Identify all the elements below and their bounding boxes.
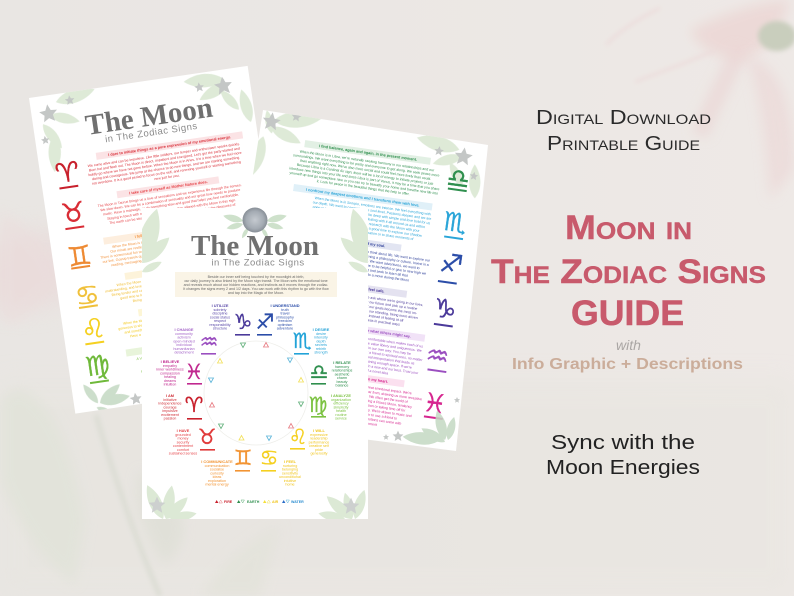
Virgo section: attention to details, health, routine and all our habits now [143, 348, 230, 365]
subtitle: info graphic plus descriptions: Info Graphic + Descriptions [512, 356, 743, 373]
Sagittarius section: horizon. It is a time of new adventures, learning a philosophy or culture. Invest in a [302, 245, 429, 267]
keyword list: Aquarius: I CHANGE [174, 327, 194, 332]
keyword list: Cancer [279, 459, 301, 486]
keyword list: Libra: balance [336, 384, 348, 388]
right sheet foliage [253, 110, 480, 198]
Gemini section: Our minds are restless, we are chatty, and we love sharing all of our thoughts [110, 232, 229, 254]
zodiac sign glyphs on wheel: ♏︎ [293, 329, 312, 353]
zodiac wheel circle [204, 341, 308, 445]
zodiac sign glyphs on wheel: ♌︎ [289, 425, 307, 449]
keyword list: Cancer: I FEEL [284, 459, 297, 464]
Pisces section: that go out of enlightenment [334, 417, 377, 427]
tagline line 1: Sync with the [551, 432, 695, 454]
intro text box: It changes the signs every 2 and 1/2 days. You can work with this rhythm to go with the flow [183, 287, 329, 291]
keyword list: Pisces: inner worldliness [156, 368, 184, 372]
element legend: FIRE [224, 500, 233, 504]
zodiac sign glyphs on wheel [185, 310, 328, 472]
Virgo section: A Virgo Moon brings a grounded need to put all things into order [136, 343, 236, 361]
keyword list: Libra: beauty [336, 380, 348, 384]
keyword list: Pisces: intuition [164, 382, 176, 386]
Aries section [88, 132, 243, 185]
Cancer section: Being kept to the ones we love will be all that matters now [132, 286, 222, 303]
keyword list: Virgo [331, 393, 351, 420]
keyword list: Sagittarius: freedom [278, 319, 292, 323]
Taurus section: The Moon in Taurus brings us a love of sensations and we experience life through the senses. [97, 183, 242, 208]
main title line 3: GUIDE [571, 294, 684, 333]
connector word: with: with [616, 337, 641, 353]
front subtitle: in The Zodiac Signs [211, 258, 305, 268]
keyword list: Scorpio: rebirth [316, 347, 326, 351]
keyword list: Virgo: I ANALYZE [331, 393, 351, 398]
Leo section: When the Moon is in Leo we want to be noticed and feel proud of all we do [123, 305, 238, 326]
Cancer section: When the Moon is in Cancer, we need comfort and security from the people [116, 266, 233, 287]
zodiac sign glyphs on wheel: ♑︎ [234, 310, 252, 334]
keyword list: Aries: passion [164, 416, 176, 420]
Scorpio section [288, 184, 434, 243]
intro text box [175, 272, 337, 297]
keyword list: Scorpio: desire [316, 332, 326, 336]
zodiac sign glyphs on wheel: ♋︎ [260, 446, 278, 470]
keyword list: Leo: expressive [310, 433, 328, 437]
keyword list: Capricorn: sobriety [214, 308, 227, 312]
heading: digital download: Digital Download [536, 107, 711, 129]
Aquarius section: being free, we'll find that we feel more in a new and our best. Trust your [308, 356, 419, 375]
keyword list: Libra [332, 360, 353, 388]
Gemini section: When the Moon is in Gemini, we want to learn about everything around us [112, 228, 226, 249]
keyword list: Leo: creative self [309, 444, 330, 448]
Aries section: new just for you. [154, 173, 180, 181]
intro text box: and reveals much about our hidden reactions, and instincts as it moves through the zodiac. [184, 283, 328, 287]
Taurus section: The earth can be steadied most by slowing on down and enjoying the pleasures of [109, 203, 236, 225]
zodiac sign glyphs on wheel: ♐︎ [256, 310, 274, 334]
Gemini section: our link. Gossip travels quickly, keep the connection going with all friends and neighbours [102, 240, 240, 264]
keyword list: Aquarius: individual [176, 343, 192, 347]
front sheet stars [149, 497, 359, 514]
zodiac sign glyphs on wheel: ♓︎ [185, 360, 203, 384]
Aquarius section: intuition for a high of a novel idea [337, 364, 389, 375]
keyword list: Leo: performance [309, 440, 329, 444]
keyword list: Gemini: ideas [213, 475, 222, 479]
document page: front sheet with zodiac wheel [133, 206, 377, 523]
Aries section: daring and courageous. We jump at the chance to do new things, and we are starting something [92, 156, 240, 181]
main title line 1: Moon in [565, 209, 692, 247]
Scorpio section: and to engage with transformation or to share moments of [324, 225, 414, 241]
keyword list: Taurus [169, 428, 197, 456]
keyword list: Libra: harmony [335, 365, 349, 369]
keyword list: Gemini: socialise [210, 468, 224, 472]
keyword list: Scorpio: depth [316, 339, 326, 343]
right sheet zodiac glyphs: ♑︎ [431, 293, 459, 326]
intro text box: our daily journey is also linked by the Moon sign transit. The Moon sets the emotional tone [184, 279, 328, 283]
left sheet zodiac glyphs: ♋︎ [73, 279, 102, 313]
Taurus section: on down and enjoying the simple things. [142, 212, 204, 225]
Libra section: When the Moon is in Libra, we're naturally seeking harmony in our relationships and our [299, 150, 435, 173]
keyword list: Taurus: sustained senses [169, 452, 197, 456]
keyword list: Cancer: sensitivity [282, 471, 298, 475]
zodiac sign glyphs on wheel: ♎︎ [310, 360, 328, 384]
Scorpio section: open to transformation. Our thirst to be deep with simple and love bold for us [312, 205, 431, 225]
Sagittarius section: be honest. Do not be afraid. It is a good time to be helpful or give to new high we [302, 254, 426, 276]
Aries section: I dare to initiate things as a pure expression of my emotional energy. [108, 135, 231, 157]
keyword list: Cancer: unconditional [279, 475, 301, 479]
keyword list: Aries: initiative [163, 398, 177, 402]
keyword list: Pisces [156, 359, 184, 386]
Aquarius section: a new idea. A perfect time for spiritual interpretation that leads us [315, 348, 415, 366]
Virgo section: I heal through service. [152, 342, 193, 352]
Aries section: not overdone. It is a good period to focus on the self, and renewing yourself or starting something [92, 160, 241, 186]
Sagittarius section: Laughter brings us out of the rut and seek to learn all that [320, 261, 408, 278]
keyword list: Taurus: I HAVE [177, 428, 190, 433]
moon illustration with leaves [222, 208, 288, 239]
keyword list: Libra: relationships [332, 369, 353, 373]
keyword list: Aries [158, 393, 182, 420]
keyword list: Aquarius: activism [177, 336, 191, 340]
Leo section: generous to shine and be seen. We have warm hearts and are playful in love with [118, 309, 244, 331]
keyword list: Virgo: service [335, 416, 347, 420]
intro text box: Beside our inner self being touched by the moonlight at birth, [208, 275, 304, 279]
Sagittarius section: I follow the wisdom of my soul. [329, 237, 386, 248]
Virgo section: Analysis, completing tasks and being useful to others always [141, 356, 234, 374]
Aries section: boldly go where we have not gone before. When the Moon is in Aries, it is a time when we feel more [88, 151, 242, 177]
keyword list: Virgo: routine [335, 413, 347, 417]
Cancer section: when high and low [163, 295, 193, 303]
Pisces section: to imagination, music and all the arts. We often get the world of [311, 386, 408, 404]
keyword list: Pisces: healing [164, 375, 176, 379]
keyword list: Gemini: I COMMUNICATE [201, 459, 233, 464]
keyword list: Gemini: mental energy [205, 482, 229, 486]
element legend [215, 500, 304, 504]
keyword list: Sagittarius: philosophy [276, 315, 294, 319]
keyword list: Capricorn [209, 303, 231, 330]
keyword list: Sagittarius: optimism [278, 323, 292, 327]
keyword list: Aquarius: detachment [174, 350, 194, 354]
element legend: AIR [272, 500, 279, 504]
Taurus section: I take care of myself as Mother Nature does. [129, 180, 208, 195]
keyword list: Scorpio [313, 327, 330, 354]
Libra section [289, 140, 440, 196]
Scorpio section: to let go. We hold the pain to be dealing with it all around us and within [316, 210, 425, 229]
right sheet bottom foliage [403, 410, 456, 445]
Aquarius section: in a new direction, helping your gaining enough space. If we're [316, 352, 412, 370]
keyword list: Aquarius [173, 327, 195, 354]
right sheet stars [263, 112, 478, 180]
Leo section [118, 308, 142, 338]
element triangles around wheel [208, 342, 304, 440]
Sagittarius section: of travelling, being optimistic and free. We want adventures, we want to [310, 251, 420, 270]
keyword list: Scorpio: I DESIRE [313, 327, 330, 332]
keyword list: Cancer: nurturing [283, 464, 297, 468]
Libra section: it. Look for peace in the beautiful things that the help to offer. [316, 179, 410, 196]
keyword list: Taurus: security [177, 440, 190, 444]
zodiac sign glyphs on wheel: ♈︎ [185, 393, 203, 417]
keyword list: Capricorn: social status [210, 315, 230, 319]
left sheet zodiac glyphs: ♌︎ [79, 313, 108, 347]
Gemini section: I follow my curiosity. [134, 230, 172, 239]
keyword list: Virgo: simplicity [334, 405, 349, 409]
keyword list: Capricorn: discipline [212, 312, 228, 316]
keyword list: Aries: courage [163, 405, 177, 409]
Leo section: Have a good time with others and remember to laugh out loud today [130, 319, 235, 338]
left sheet zodiac glyphs: ♊︎ [65, 240, 94, 274]
Cancer section [105, 270, 142, 302]
keyword list: Pisces: dreams [164, 379, 176, 383]
Taurus section: music. Have a massage, or do something slow and good that helps you feel comfortable. [103, 193, 239, 216]
Capricorn section: We take the long view, plan for our future and pick up a routine [321, 293, 418, 311]
Cancer section: good time to look after our home and to keep our roots well cared for now [120, 280, 233, 300]
keyword list: Gemini: exploration [208, 479, 226, 483]
Pisces section: art with our sensitivity and emotions. During a Pisces Moon, tendency [305, 390, 413, 409]
keyword list: Gemini: communication [205, 464, 229, 468]
Pisces section: to merge with others, feeling compassion or taking time off for [310, 395, 406, 413]
Aquarius section: When the Moon is in Aquarius we're comfortable when makes each of us [311, 329, 424, 349]
Capricorn section: I do what makes me feel safe. [332, 282, 385, 294]
keyword list: Sagittarius: I UNDERSTAND [270, 303, 300, 308]
keyword list: Aquarius: humanitarian [173, 347, 195, 351]
Pisces section [368, 375, 422, 426]
Gemini section [100, 232, 142, 266]
Cancer section: I nurture my emotions. [154, 265, 195, 275]
keyword list: Sagittarius [270, 303, 300, 330]
left sheet foliage bottom [83, 384, 130, 410]
Scorpio section: our depth. We want to connect at the soul level. Passions deepen and we are [312, 200, 432, 221]
keyword list: Gemini: curiosity [210, 471, 224, 475]
Capricorn section: We wrote ideas and ideas in practical ways [333, 313, 400, 327]
Sagittarius section: Cheerfulness is ours. You might do a move during the Moon [317, 266, 409, 282]
Pisces section: When the Moon is in Pisces, we feel great emotional impact. We're [309, 377, 412, 395]
zodiac sign glyphs on wheel: ♉︎ [198, 425, 216, 449]
keyword list: Pisces: compassion [160, 371, 180, 375]
right sheet zodiac glyphs: ♎︎ [445, 163, 472, 196]
keyword list: Aries: excitement [161, 413, 179, 417]
Aries section: We come alive and can be impulsive. Like little soldiers, our temper and enthusiasm sparks quickly. [87, 142, 240, 168]
keyword list: Pisces: empathy [163, 364, 177, 368]
keyword list: Cancer: belonging [282, 468, 298, 472]
Scorpio section: I confront my deepest emotions and I transform them with love. [306, 188, 420, 208]
Leo section: I shine with my light. [164, 302, 202, 312]
Pisces section: have to do a kindness, each one's emotions can come with [311, 409, 402, 426]
keyword list: Scorpio: strength [314, 350, 328, 354]
Pisces section: It's a great time to find rest and to pull away. We're drawn to music and [303, 399, 412, 418]
heading: printable guide: Printable Guide [547, 133, 700, 155]
keyword list: Scorpio: secrets [315, 343, 327, 347]
Libra section: yourself up and go someplace nice or you can try to beautify your home and breathe new life into [289, 171, 438, 196]
Aquarius section: I live by my values no matter what others might say. [318, 322, 411, 339]
Cancer section: understanding, and love around us. We are more sensitive and caring than usual during this [105, 269, 246, 294]
Virgo section: health and wellbeing [173, 369, 205, 378]
Sagittarius section [368, 240, 430, 282]
left sheet zodiac glyphs: ♈︎ [53, 156, 82, 190]
keyword list: Aries: independence [158, 402, 182, 406]
keyword list: Libra: aesthetic [335, 372, 350, 376]
Gemini section: There is nonsensical fun to have. Keep the conversation going with everyone here and now [100, 235, 241, 260]
zodiac sign glyphs on wheel: ♊︎ [234, 446, 252, 470]
Libra section: introduce new things into your life and since Libra is part of Venus, it may be a time that you share [289, 166, 440, 191]
Gemini section: reading, messaging, social media and learning are all favoured during this time [111, 246, 232, 267]
Pisces section: sensitive to all around us. We need to disappear from, drawing us more receptive [297, 380, 422, 401]
document page: left sheet, Aries to Virgo [29, 66, 258, 414]
Leo section: and something theatrical brings us joy. Our creative spark is very high now [124, 314, 239, 335]
keyword list: Leo: pride [315, 448, 323, 452]
left sheet zodiac glyphs: ♉︎ [59, 196, 87, 230]
tagline line 2: Moon Energies [546, 457, 700, 479]
zodiac sign glyphs on wheel: ♍︎ [309, 393, 327, 417]
keyword list: Taurus: grounded [175, 433, 191, 437]
Scorpio section: Could be a time to do a kind of research with the Moon with your [320, 215, 421, 233]
keyword list: Leo: generosity [310, 452, 328, 456]
keyword list: Capricorn: respect [214, 319, 226, 323]
Taurus section: We slow down. We can be a combination of sensuality and our great love needs to produce [100, 188, 241, 212]
Leo section: Time outside to shine with friends and family [148, 326, 217, 340]
Sagittarius section: When the Moon is in Sagittarius, we love to think about life. We want to explore our [302, 241, 431, 263]
Capricorn section [368, 285, 423, 326]
left sheet zodiac glyphs [55, 160, 109, 384]
Aquarius section: We're often very open-minded and we value liberty and uniqueness. We [311, 333, 422, 353]
main title line 2: The Zodiac Signs [491, 253, 766, 291]
Libra section: surroundings. We want everything to be pretty and everyone to get along. We seek peace more [293, 153, 440, 178]
keyword list: Taurus: contentment [173, 444, 193, 448]
right sheet bottom stars [383, 397, 460, 441]
keyword list: Aquarius: open-minded [173, 339, 195, 343]
Virgo section: brings us, and those around us, a sense of quiet calm [147, 361, 230, 377]
keyword list: Capricorn: I UTILIZE [212, 303, 229, 308]
Capricorn section: We work and are serious about our goals become the most im- [320, 298, 418, 315]
keyword list: Virgo: efficiency [333, 402, 349, 406]
right sheet zodiac glyphs: ♐︎ [438, 248, 465, 281]
front foliage [133, 206, 377, 523]
left sheet subtitle: in The Zodiac Signs [104, 121, 198, 145]
element legend: WATER [291, 500, 304, 504]
keyword list: Libra: I RELATE [333, 360, 351, 365]
Aquarius section [368, 326, 426, 374]
Pisces section: art as we allow ourselves to slip, or to use a friend to [316, 405, 397, 421]
keyword list: Cancer: intuitive [284, 479, 296, 483]
right sheet zodiac glyphs: ♒︎ [424, 340, 451, 373]
Capricorn section: and practical. We're not instead of feeling at all [331, 309, 404, 323]
right sheet zodiac glyphs [424, 170, 468, 420]
intro text box: and tap into the Magic of the Moon. [228, 291, 284, 295]
keyword list: Pisces: I BELIEVE [161, 359, 180, 364]
keyword list: Sagittarius: truth [281, 308, 289, 312]
keyword list: Scorpio: intensity [314, 336, 328, 340]
left sheet stars [39, 77, 232, 144]
Cancer section: Being tender and caring brings us closer. Look after family and feed the soul around [111, 274, 240, 297]
right sheet zodiac glyphs: ♓︎ [421, 388, 448, 421]
Libra section: I find balance, again and again, in the present moment. [319, 144, 417, 162]
left sheet title: The Moon [83, 92, 215, 142]
left sheet foliage top [42, 74, 253, 172]
Capricorn section: portant. Work is where we prove our standing, being more driven [318, 302, 418, 320]
keyword list: Virgo: organization [331, 398, 351, 402]
keyword list: Libra: charm [337, 376, 347, 380]
Aquarius section: need some space to do things in our own way. You may be [321, 339, 411, 356]
Aquarius section: feeling detached and prefer to seek out a friend to spiritual ones, no matter [308, 342, 424, 362]
Capricorn section: When the Moon is in Capricorn we ask where we're going in our lives. [316, 288, 424, 307]
keyword list: Taurus: money [177, 437, 189, 441]
keyword list: Sagittarius: travel [280, 312, 290, 316]
Taurus section: Staying in touch with nature is a great way to stay aligned with the Moon in this sign. [107, 198, 236, 221]
keyword list: Leo [309, 428, 330, 456]
Pisces section: I follow the path of magic and open my heart. [307, 369, 388, 384]
Scorpio section: intuition and rebirth this time. It is a good time to explore our shadow [317, 219, 423, 238]
keyword list: Gemini [201, 459, 233, 486]
element legend: EARTH [247, 500, 260, 504]
keyword list: Virgo: health [336, 409, 346, 413]
document page: right sheet, Libra to Pisces [253, 110, 488, 451]
keyword list: Leo: I WILL [313, 428, 325, 433]
keyword list: Capricorn: structure [213, 326, 227, 330]
Libra section: than anything right now. We've also more social and could feel more lively than usual. [300, 159, 431, 181]
keyword list: Cancer: home [285, 482, 295, 486]
keyword list: Aries: impulsive [162, 409, 178, 413]
Virgo section [126, 347, 142, 373]
right sheet zodiac glyphs: ♏︎ [441, 207, 469, 240]
left sheet zodiac glyphs: ♍︎ [83, 349, 112, 383]
left sheet bottom star [130, 393, 142, 404]
Scorpio section: When the Moon is in Scorpio, emotions are intense. We feel everything with [314, 196, 431, 216]
zodiac sign glyphs on wheel: ♒︎ [200, 330, 218, 354]
keyword list: Taurus: comfort [177, 448, 189, 452]
keyword list: Aquarius: community [175, 332, 193, 336]
keyword list: Leo: leadership [310, 437, 328, 441]
Taurus section [98, 176, 242, 224]
keyword list: Aries: I AM [166, 393, 174, 398]
Libra section: Because Libra is a Cardinal Air sign, there will be a lot of energy to initiate projects or just [297, 163, 434, 186]
keyword list: Capricorn: responsibility [209, 323, 231, 327]
Aries section: Burn hot and flash out. The Moon is direct, impatient and energized, Let's get the party started and [89, 146, 240, 173]
keyword list: Sagittarius: adventure [277, 326, 293, 330]
front title: The Moon [191, 230, 319, 262]
